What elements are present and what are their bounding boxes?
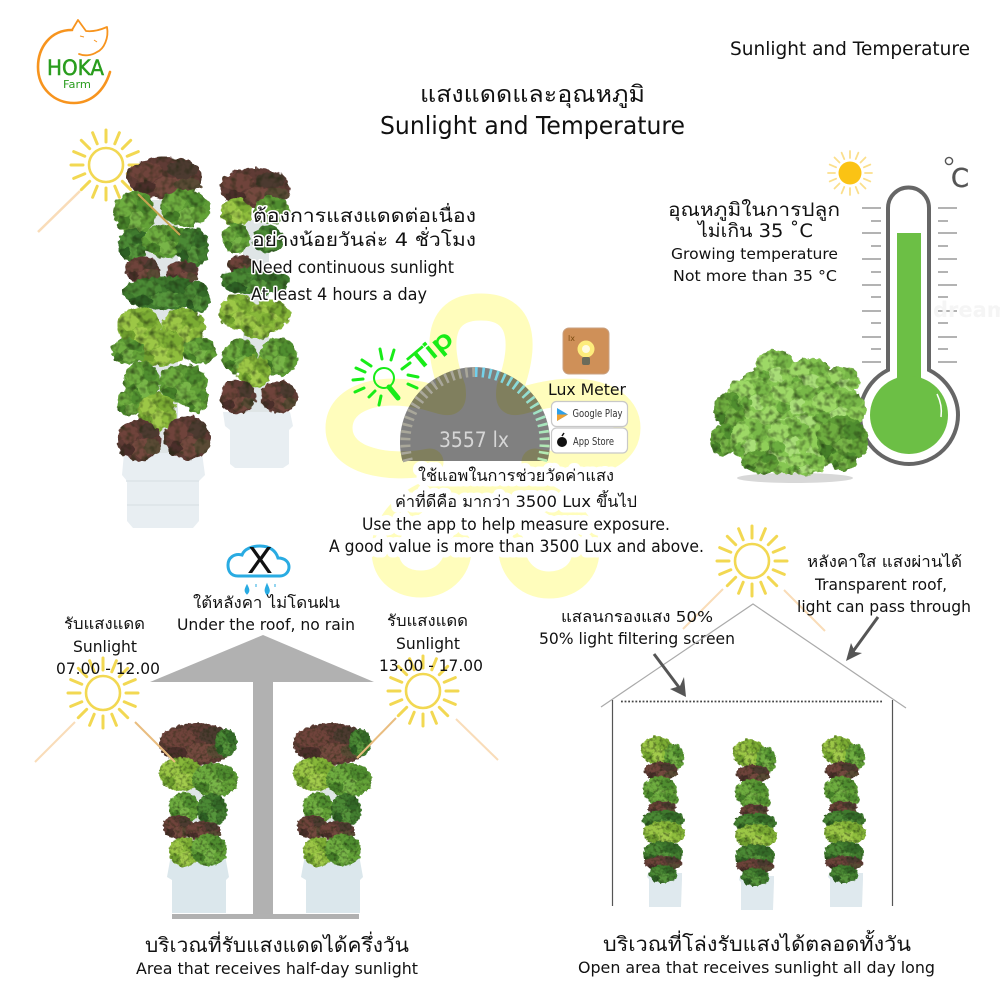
icon: lux meter app: lx — [568, 334, 575, 343]
caption: half-day area: Area that receives half-day sunlight — [136, 959, 418, 978]
arrow to filter screen — [654, 654, 686, 697]
text: sunlight need: At least 4 hours a day — [251, 285, 427, 304]
icon: small yellow sun — [828, 151, 872, 195]
arrow to transparent roof — [846, 617, 878, 661]
icon: thermometer — [860, 157, 969, 464]
text: morning sunlight: 07.00 - 12.00 — [56, 659, 160, 678]
degree C sign: C — [951, 164, 969, 194]
open-area tower left — [641, 736, 685, 907]
caption: open area — [578, 930, 935, 977]
badge: Google Play — [552, 402, 628, 426]
text: growing temperature: Not more than 35 °C — [673, 267, 837, 285]
text: lux explanation: ใช้แอพในการช่วยวัดค่าแสง — [418, 466, 614, 485]
text: filter screen — [539, 608, 735, 648]
text: morning sunlight: รับแสงแดด — [64, 615, 145, 633]
text: transparent roof: หลังคาใส แสงผ่านได้ — [807, 553, 962, 571]
scale ticks — [862, 208, 957, 362]
text: afternoon sunlight: 13.00 - 17.00 — [379, 656, 483, 675]
text: lux explanation — [329, 466, 704, 556]
text: growing temperature: Growing temperature — [671, 245, 838, 263]
text: afternoon sunlight: รับแสงแดด — [387, 612, 468, 630]
caption: open area: Open area that receives sunlight all day long — [578, 958, 935, 977]
half-day tower right — [293, 723, 372, 913]
glass outline — [860, 188, 958, 464]
open-area tower right — [822, 736, 866, 907]
text: transparent roof — [797, 553, 971, 616]
text: lux explanation: Use the app to help measure exposure. — [362, 515, 670, 534]
text: under the roof — [177, 594, 355, 634]
badge: App Store: App Store — [573, 436, 614, 448]
open-area tower middle — [733, 739, 777, 910]
lux gauge — [400, 367, 550, 461]
text: lux explanation: ค่าที่ดีคือ มากว่า 3500 Lux ขึ้นไป — [395, 490, 637, 511]
text: under the roof: Under the roof, no rain — [177, 615, 355, 634]
text: filter screen: แสลนกรองแสง 50% — [561, 608, 713, 626]
text: sunlight need: Need continuous sunlight — [251, 258, 455, 277]
logo: HOKA Farm: Farm — [63, 78, 91, 91]
badge: App Store — [552, 428, 628, 453]
text: morning sunlight: Sunlight — [73, 637, 137, 656]
text: sunlight need: ต้องการแสงแดดต่อเนื่อง — [253, 203, 476, 227]
sun ray across tower — [138, 194, 180, 235]
text: morning sunlight — [56, 615, 160, 678]
label: Lux Meter: Lux Meter — [548, 380, 626, 399]
icon: rain cloud crossed out: X — [247, 541, 273, 582]
text: filter screen: 50% light filtering screen — [539, 629, 735, 648]
lux gauge: 3557 lx — [439, 428, 509, 452]
icon: tip bulb — [353, 324, 459, 405]
shade roof structure — [150, 635, 374, 919]
icon: rain cloud crossed out — [228, 541, 289, 595]
title — [380, 82, 685, 140]
page label: Sunlight and Temperature — [730, 38, 970, 60]
text: sunlight need — [251, 203, 476, 304]
half-day tower left — [159, 723, 238, 913]
icon: sun top left — [38, 130, 141, 232]
mercury — [870, 233, 948, 454]
degree C sign — [945, 157, 969, 194]
text: sunlight need: อย่างน้อยวันล่ะ 4 ชั่วโมง — [252, 227, 476, 251]
text: under the roof: ใต้หลังคา ไม่โดนฝน — [193, 594, 340, 612]
text: growing temperature: ไม่เกิน 35 ˚C — [696, 220, 813, 242]
title: แสงแดดและอุณหภูมิ — [420, 82, 645, 108]
logo: HOKA Farm: HOKA — [47, 56, 105, 80]
caption: open area: บริเวณที่โล่งรับแสงได้ตลอดทั้งวัน — [603, 930, 911, 956]
greenhouse outline — [601, 604, 906, 906]
text: growing temperature: อุณหภูมิในการปลูก — [668, 199, 840, 222]
icon: sun above greenhouse — [683, 526, 825, 631]
bulb — [374, 368, 398, 398]
caption: half-day area — [136, 931, 418, 978]
text: lux explanation: A good value is more than 3500 Lux and above. — [329, 537, 704, 556]
icon: morning sun — [35, 658, 175, 762]
photo: front tower garden — [111, 157, 217, 528]
photo: lettuce — [710, 350, 868, 483]
text: growing temperature — [668, 199, 840, 285]
text: transparent roof: light can pass through — [797, 597, 971, 616]
icon: afternoon sun — [357, 656, 498, 760]
text: afternoon sunlight — [379, 612, 483, 675]
logo: HOKA Farm — [38, 20, 110, 103]
text: transparent roof: Transparent roof, — [814, 575, 947, 594]
badge: Google Play: Google Play — [572, 408, 622, 420]
photo: back tower garden — [219, 168, 297, 468]
icon: tip bulb: Tip — [403, 324, 459, 377]
icon: lux meter app — [563, 328, 609, 374]
text: afternoon sunlight: Sunlight — [396, 634, 460, 653]
yellow trefoil background — [339, 307, 627, 585]
title: Sunlight and Temperature — [380, 111, 685, 140]
caption: half-day area: บริเวณที่รับแสงแดดได้ครึ่งวัน — [145, 931, 409, 957]
